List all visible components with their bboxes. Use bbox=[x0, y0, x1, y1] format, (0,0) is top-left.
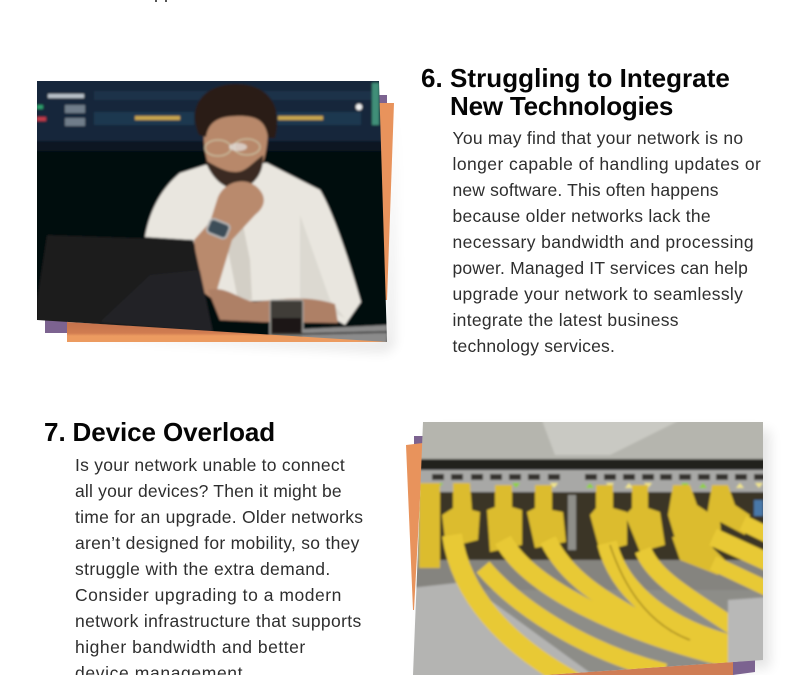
heading text 6 bbox=[450, 63, 730, 121]
text block: section 6 body: power. Managed IT services can help bbox=[452, 258, 748, 278]
text block: section 6 body: longer capable of handling updates or bbox=[452, 154, 761, 174]
text block: section 7 body: Consider upgrading to a modern bbox=[75, 585, 342, 605]
text block: section 6 body: technology services. bbox=[452, 336, 615, 356]
heading text 6: Struggling to Integrate bbox=[450, 63, 730, 93]
heading: 7 Device Overload bbox=[44, 417, 275, 447]
photo: man thinking at laptop bbox=[37, 81, 396, 354]
text block: section 7 body bbox=[75, 455, 363, 675]
text block: section 6 body: necessary bandwidth and processing bbox=[452, 232, 754, 252]
text block: section 6 body: You may find that your network is no bbox=[452, 128, 743, 148]
heading text 7: Device Overload bbox=[72, 417, 275, 447]
text block: section 7 body: network infrastructure that supports bbox=[75, 611, 362, 631]
text block: section 6 body: new software. This often happens bbox=[452, 180, 719, 200]
text block: section 7 body: Is your network unable to connect bbox=[75, 455, 345, 475]
number 6: 6. bbox=[421, 63, 443, 93]
cropped text fragment at top edge bbox=[155, 0, 167, 2]
text block: section 6 body: integrate the latest business bbox=[452, 310, 679, 330]
text block: section 7 body: all your devices? Then it might be bbox=[75, 481, 342, 501]
heading text 6: New Technologies bbox=[450, 91, 673, 121]
heading: 6 Struggling to Integrate New Technologies bbox=[421, 63, 730, 121]
text block: section 7 body: aren’t designed for mobility, so they bbox=[75, 533, 360, 553]
text block: section 6 body: upgrade your network to seamlessly bbox=[452, 284, 743, 304]
photo: yellow network cables in switch bbox=[406, 422, 772, 675]
text block: section 7 body: higher bandwidth and better bbox=[75, 637, 306, 657]
text block: section 7 body: struggle with the extra demand. bbox=[75, 559, 331, 579]
text block: section 6 body: because older networks lack the bbox=[452, 206, 711, 226]
number 7: 7. bbox=[44, 417, 66, 447]
text block: section 7 body: time for an upgrade. Older networks bbox=[75, 507, 363, 527]
text block: section 6 body bbox=[452, 128, 761, 356]
